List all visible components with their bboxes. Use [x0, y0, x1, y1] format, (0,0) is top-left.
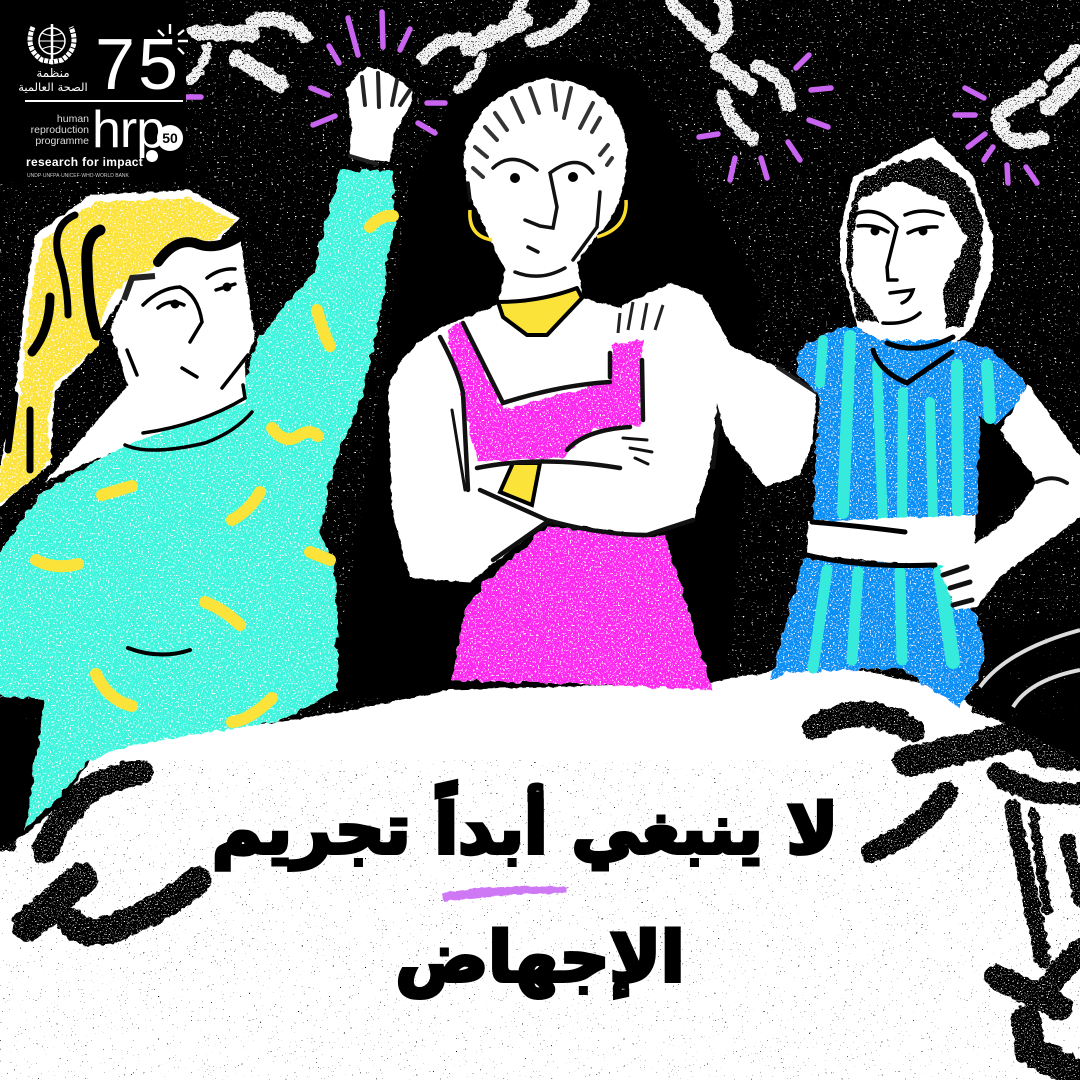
logo backing — [0, 0, 186, 182]
logo divider — [25, 100, 183, 102]
gold earrings — [470, 200, 626, 240]
collar and belt lines — [807, 337, 1028, 566]
black triangle between arm and waist — [973, 417, 1037, 540]
purple divider — [442, 886, 567, 902]
logo: dot — [146, 150, 158, 162]
blue skirt — [770, 558, 985, 708]
chain: upper centre — [424, 0, 584, 90]
raised hand — [346, 66, 413, 162]
logo: programme name: programme — [35, 135, 89, 147]
logo: WHO Arabic name — [18, 66, 88, 94]
logo: WHO emblem — [30, 24, 74, 62]
logo: 50 badge — [157, 125, 183, 151]
dark hair — [847, 157, 983, 327]
black strip lower left — [0, 695, 45, 850]
woman: right, with blue dress — [618, 137, 1080, 708]
logo: WHO Arabic name: منظمة — [36, 66, 70, 80]
chain: upper right — [672, 0, 788, 138]
arm line — [777, 367, 817, 393]
dark hair mass behind centre figure — [330, 59, 760, 700]
yellow sweater flecks — [36, 216, 393, 722]
face features — [468, 159, 600, 276]
blonde hair — [0, 198, 236, 512]
logo: tagline: research for impact — [26, 155, 143, 169]
sweater — [0, 170, 394, 830]
pink dress bodice — [447, 323, 643, 462]
logo: hrp: hrp — [92, 101, 164, 159]
logo block — [0, 0, 188, 182]
hair white underlay — [0, 190, 240, 515]
skirt stripes — [813, 570, 953, 668]
body outlines — [440, 317, 722, 560]
arm and finger lines — [943, 478, 1067, 605]
logo: partners: UNDP·UNFPA·UNICEF·WHO·WORLD BANK — [27, 173, 130, 179]
hair strands — [8, 215, 100, 470]
white chalk ground — [0, 668, 1080, 1080]
shoulder hand fingers — [618, 302, 663, 333]
broken chain: bottom left — [28, 772, 198, 931]
title line 2: الإجهاض — [395, 918, 685, 999]
yellow hand — [500, 463, 540, 505]
logo: programme name — [31, 113, 89, 147]
head and neck — [463, 78, 627, 305]
title line 1: لا ينبغي أبداً تجريم — [212, 781, 838, 870]
logo: programme name: human — [57, 113, 89, 125]
logo: 75: 75 — [95, 25, 181, 105]
chains along the top — [190, 0, 1080, 141]
broken chain: bottom right — [815, 620, 1080, 1075]
hair outline — [840, 137, 993, 345]
face and neck — [45, 240, 255, 482]
torso and arms — [388, 290, 720, 582]
woman: centre, arms crossed — [388, 78, 722, 690]
logo block: 50 — [162, 130, 178, 146]
arm on hip — [940, 385, 1080, 610]
arm on shoulder — [618, 283, 817, 487]
blue dress top — [797, 327, 1028, 530]
woman: left, raising arm — [0, 66, 413, 830]
logo: programme name: reproduction — [31, 124, 89, 136]
dark hair fringe — [158, 236, 240, 262]
title — [212, 781, 838, 999]
finger lines — [350, 73, 410, 164]
cyan dress stripes — [820, 336, 990, 525]
face features — [853, 211, 943, 323]
logo: rays — [158, 24, 188, 54]
black specks on ground — [0, 760, 1080, 1080]
logo: WHO Arabic name: الصحة العالمية — [18, 80, 88, 94]
white belt — [807, 515, 975, 570]
chain: upper left — [190, 18, 305, 84]
gold collar — [498, 288, 582, 335]
hair hatching — [473, 85, 612, 177]
purple sparks — [186, 12, 1037, 183]
facial features — [125, 269, 252, 655]
chain: far right — [998, 50, 1080, 141]
pink skirt — [452, 527, 712, 690]
